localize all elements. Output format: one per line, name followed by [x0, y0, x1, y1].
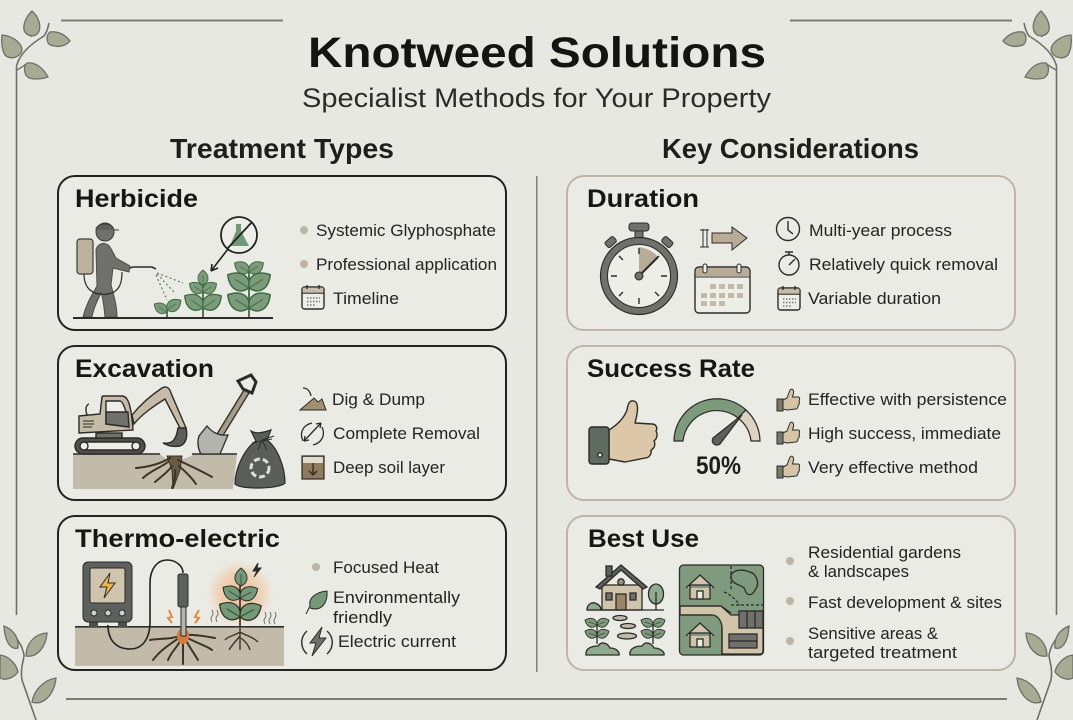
bullet list: herbicide: Systemic Glyphosphate — [316, 221, 496, 240]
panel: success rate — [567, 346, 1015, 500]
ground — [73, 317, 273, 319]
bullet list: best use: targeted treatment — [808, 643, 957, 662]
icon: calendar — [695, 264, 750, 313]
subtitle: Specialist Methods for Your Property — [302, 83, 772, 113]
bullet list: best use: Fast development & sites — [808, 593, 1002, 612]
illustration: site plan map — [680, 565, 764, 655]
illustration: heat glow around plant — [206, 560, 274, 628]
plants — [152, 258, 275, 318]
gauge value: 50% — [696, 452, 741, 480]
illustration: house and garden — [583, 565, 667, 655]
bullet list: thermo-electric — [302, 558, 461, 656]
bullet list: duration — [776, 218, 998, 310]
bullet list: herbicide: Timeline — [333, 289, 399, 308]
bullet list: best use: Residential gardens — [808, 543, 961, 562]
bullet list: excavation: Deep soil layer — [333, 458, 445, 477]
panel: duration — [567, 176, 1015, 330]
bullet list: excavation: Complete Removal — [333, 424, 480, 443]
bullet list: excavation: Dig & Dump — [332, 390, 425, 409]
arrow — [211, 249, 228, 271]
bullet list: duration: Variable duration — [808, 289, 941, 308]
heading: herbicide: Herbicide — [75, 185, 198, 213]
bullet list: herbicide: Professional application — [316, 255, 497, 274]
chart: gauge — [674, 399, 760, 445]
illustration: soil — [75, 626, 284, 666]
panel: thermo-electric — [58, 516, 506, 670]
central divider — [536, 176, 538, 672]
top right botanical corner — [1003, 11, 1071, 615]
panel: excavation — [58, 346, 506, 500]
heading: duration: Duration — [587, 185, 699, 213]
bullet list: success rate: Very effective method — [808, 458, 978, 477]
bottom right botanical corner — [1017, 626, 1073, 720]
illustration: shovel — [198, 375, 256, 454]
bullet list: herbicide — [300, 221, 497, 309]
icon: removal arrows — [301, 423, 323, 445]
heading: success rate: Success Rate — [587, 355, 755, 383]
title: Knotweed Solutions — [308, 29, 766, 77]
bullet list: success rate: Effective with persistence — [808, 390, 1007, 409]
icon: leaf — [306, 591, 327, 614]
icon: recycling bag — [235, 430, 285, 488]
bullet list: success rate: High success, immediate — [808, 424, 1001, 443]
heading: thermo-electric: Thermo-electric — [75, 525, 280, 553]
bullet list: thermo-electric: Environmentally — [333, 588, 461, 607]
bottom rule — [66, 698, 1007, 700]
bullet list: excavation — [300, 388, 480, 479]
panel: best use — [567, 516, 1015, 670]
heading: best use: Best Use — [588, 525, 699, 553]
bullet list: best use — [786, 543, 1002, 662]
panel: herbicide — [58, 176, 506, 330]
bullet list: thermo-electric: Focused Heat — [333, 558, 439, 577]
illustration: probe and burnt roots — [150, 574, 215, 664]
bullet list: duration: Multi-year process — [809, 221, 952, 240]
heading: key considerations: Key Considerations — [662, 133, 919, 164]
top left rule — [61, 20, 283, 22]
illustration: cable — [108, 560, 183, 649]
top right rule — [790, 20, 1012, 22]
icon: deep soil layer — [302, 456, 324, 479]
bullet list: thermo-electric: friendly — [333, 608, 393, 627]
illustration: stopwatch — [600, 223, 678, 314]
illustration: power unit — [83, 562, 132, 627]
heading: excavation: Excavation — [75, 355, 214, 383]
bottom left botanical corner — [0, 626, 56, 720]
bullet list: best use: & landscapes — [808, 562, 909, 581]
bullet list: duration: Relatively quick removal — [809, 255, 998, 274]
icon: electric current — [302, 627, 332, 656]
bullet list: thermo-electric: Electric current — [338, 632, 456, 651]
icon: dig mound — [300, 388, 326, 410]
bullet list: success rate — [777, 389, 1007, 478]
illustration: excavator — [75, 387, 187, 454]
icon: clock — [776, 218, 800, 240]
icon: thumbs up — [589, 401, 657, 464]
illustration: worker spraying plants — [73, 217, 275, 319]
heading: treatment types: Treatment Types — [170, 133, 394, 164]
icon: small stopwatch — [779, 252, 799, 275]
icon: crossed-out chemical flask — [221, 217, 257, 253]
illustration: plant under heat — [211, 563, 276, 650]
arrow — [700, 227, 747, 250]
illustration: soil and roots — [73, 454, 237, 489]
top left botanical corner — [2, 11, 70, 615]
bullet list: best use: Sensitive areas & — [808, 624, 939, 643]
